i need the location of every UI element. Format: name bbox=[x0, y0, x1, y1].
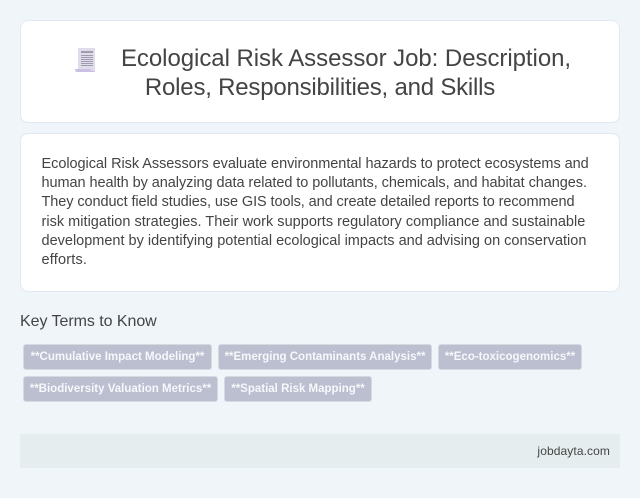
description text: human health by analyzing data related to pollutants, chemicals, and habitat changes. bbox=[42, 175, 587, 191]
heading: key terms: Key Terms to Know bbox=[20, 313, 157, 330]
panel: title card bbox=[20, 20, 620, 123]
tag bbox=[438, 344, 582, 370]
description text bbox=[42, 156, 589, 268]
description text: risk mitigation strategies. Their work supports regulatory compliance and sustainable bbox=[42, 214, 585, 230]
tag bbox=[224, 376, 372, 402]
description text: Ecological Risk Assessors evaluate environmental hazards to protect ecosystems and bbox=[42, 156, 589, 172]
tag bbox=[218, 344, 432, 370]
title: Roles, Responsibilities, and Skills bbox=[145, 74, 495, 101]
description text: development by identifying potential ecological impacts and advising on conservation bbox=[42, 233, 586, 249]
tag: **Spatial Risk Mapping** bbox=[231, 383, 365, 395]
tag bbox=[23, 376, 218, 402]
tag: **Emerging Contaminants Analysis** bbox=[225, 351, 425, 363]
tag: **Eco-toxicogenomics** bbox=[445, 351, 575, 363]
icon: document scroll bbox=[75, 48, 95, 72]
title: Ecological Risk Assessor Job: Description, bbox=[121, 45, 571, 72]
footer bar bbox=[20, 434, 620, 468]
tag: **Cumulative Impact Modeling** bbox=[31, 351, 204, 363]
footer source: jobdayta.com bbox=[537, 444, 610, 458]
tag group bbox=[23, 344, 582, 402]
title bbox=[121, 45, 571, 101]
tag bbox=[23, 344, 212, 370]
description text: efforts. bbox=[42, 252, 87, 268]
description text: They conduct field studies, use GIS tools, and create detailed reports to recommend bbox=[42, 194, 574, 210]
tag: **Biodiversity Valuation Metrics** bbox=[30, 383, 211, 395]
panel: description card bbox=[20, 133, 620, 292]
